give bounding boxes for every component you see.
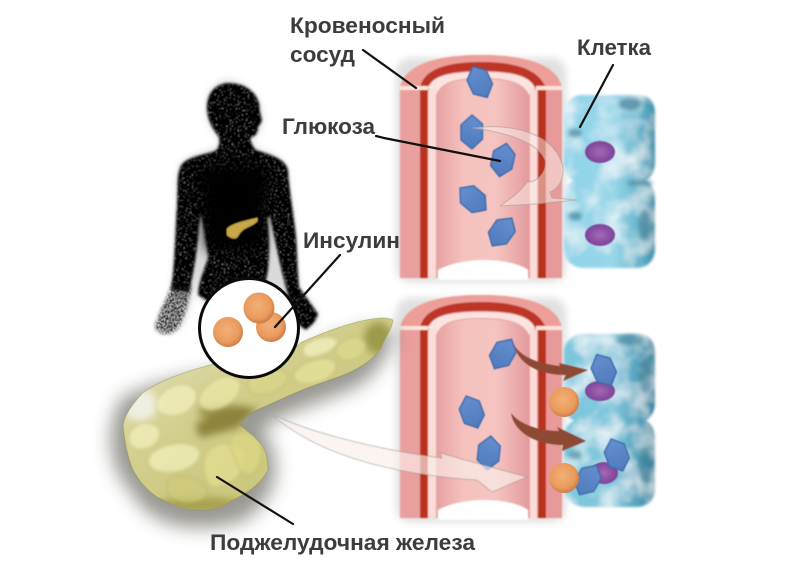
body	[171, 83, 318, 330]
pancreas shadow	[111, 329, 395, 528]
pancreas body	[123, 318, 393, 510]
silhouette glow	[157, 80, 318, 332]
panel: bottom cells	[564, 334, 655, 507]
cell dark patches	[568, 335, 651, 483]
small pancreas in body	[227, 218, 258, 238]
panel: top cells	[564, 95, 655, 268]
arrow: brown lower	[511, 413, 586, 451]
cell lower	[564, 418, 655, 507]
cell lower	[564, 178, 655, 268]
glucose molecules in bottom vessel and cells	[456, 334, 633, 500]
cell dark patches	[568, 98, 653, 241]
insulin ball lower	[549, 463, 579, 493]
panel: pancreas	[111, 318, 395, 528]
nucleus lower	[590, 462, 618, 484]
glucose molecules in top vessel	[453, 62, 520, 252]
hand, fading into grain	[155, 282, 192, 334]
leader lines	[217, 50, 613, 524]
label: blood vessel	[290, 13, 445, 67]
cell upper	[564, 334, 655, 424]
nucleus upper	[585, 381, 615, 401]
nucleus lower	[585, 224, 615, 246]
insulin ball left	[213, 317, 243, 347]
insulin magnifier circle	[200, 278, 298, 378]
label: blood vessel: сосуд	[290, 42, 355, 67]
arrow: insulin release from pancreas	[273, 415, 527, 492]
insulin ball lower right	[256, 312, 286, 342]
pancreas lobes	[122, 322, 392, 513]
arrow: glucose to cell, top	[472, 127, 577, 206]
arrow: brown upper	[514, 345, 588, 381]
panel: top blood vessel	[396, 55, 566, 282]
vessel	[400, 55, 562, 280]
label: cell: Клетка	[577, 35, 652, 60]
torso dark core	[200, 165, 268, 250]
label: blood vessel: Кровеносный	[290, 13, 445, 38]
label: pancreas: Поджелудочная железа	[210, 530, 476, 555]
nucleus upper	[585, 141, 615, 163]
vessel	[400, 295, 562, 520]
vessel shadow	[396, 58, 566, 282]
label: insulin: Инсулин	[303, 228, 400, 253]
panel: bottom blood vessel	[396, 295, 566, 522]
vessel shadow	[396, 298, 566, 522]
insulin ball upper	[549, 387, 579, 417]
insulin ball top	[244, 292, 274, 324]
cell upper	[564, 95, 655, 184]
label: glucose: Глюкоза	[282, 114, 376, 139]
panel: human silhouette	[155, 80, 318, 334]
